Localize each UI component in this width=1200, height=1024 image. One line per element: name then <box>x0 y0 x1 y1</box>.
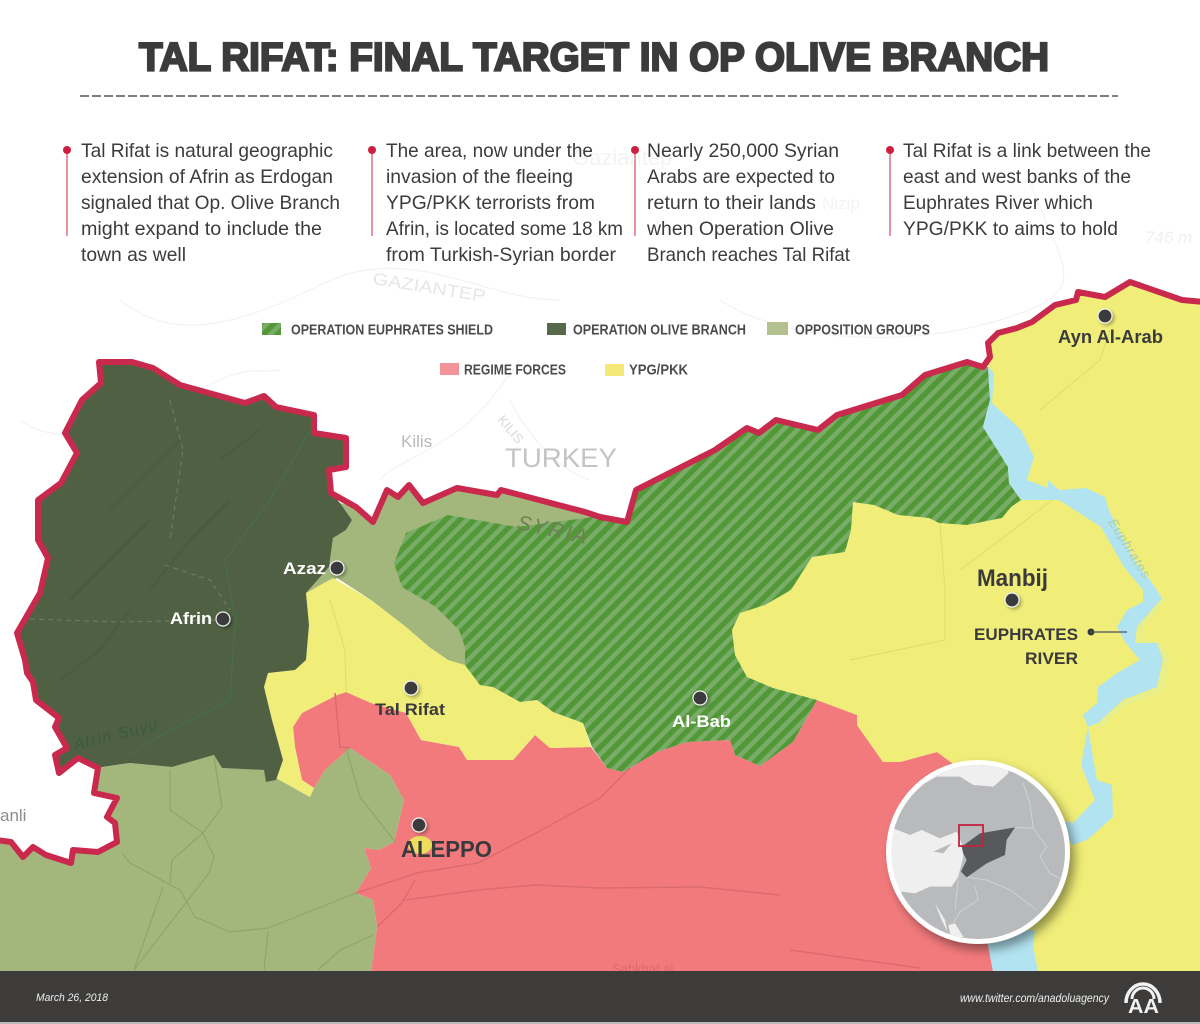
basemap: faint terrain lines and place names: 746 m <box>1145 228 1192 247</box>
city: Manbij <box>977 565 1048 607</box>
legend item: Regime Forces: REGIME FORCES <box>464 362 566 378</box>
map label: Euphrates on river: Euphrates <box>1105 516 1154 581</box>
region: regime forces <box>293 692 1000 972</box>
inset: Syria highlighted <box>961 827 1015 877</box>
text block: Euphrates link <box>886 140 1151 240</box>
text block: Euphrates link: Tal Rifat is a link between the <box>903 140 1151 162</box>
basemap: faint terrain lines and place names: TURKEY <box>505 443 617 473</box>
text block: geographic extension: town as well <box>81 244 186 266</box>
river: Euphrates bank highlight <box>1098 598 1167 727</box>
city: Al-Bab <box>672 691 731 731</box>
text block: geographic extension: signaled that Op. Olive Branch <box>81 192 340 214</box>
region: YPG/PKK west <box>264 578 591 797</box>
map label: Sabkhat al: Sabkhat al <box>612 961 674 976</box>
city: Azaz: Azaz <box>283 559 326 578</box>
city: Manbij: Manbij <box>977 565 1048 592</box>
callout: Euphrates River: RIVER <box>1025 649 1078 668</box>
river: Euphrates lower reach <box>985 930 1038 972</box>
text block: geographic extension: Tal Rifat is natural geographic <box>81 140 333 162</box>
text block: distance from border: Afrin, is located some 18 km <box>386 218 623 240</box>
text block: Euphrates link: YPG/PKK to aims to hold <box>903 218 1118 240</box>
city markers and labels <box>170 309 1163 862</box>
text block: Euphrates link: east and west banks of the <box>903 166 1131 188</box>
map label: Syria: SYRIA <box>515 511 591 549</box>
text block: geographic extension: might expand to include the <box>81 218 322 240</box>
basemap: faint terrain lines and place names: GAZIANTEP <box>371 269 487 306</box>
yellow patch in Aleppo <box>408 836 432 854</box>
text block: distance from border: invasion of the fleeing <box>386 166 573 188</box>
region: YPG/PKK east <box>732 282 1200 972</box>
text block: returning Syrian Arabs: return to their lands <box>647 192 816 214</box>
legend item: Opposition Groups: OPPOSITION GROUPS <box>795 322 930 338</box>
city: Tal Rifat: Tal Rifat <box>375 700 445 719</box>
legend item: Operation Euphrates Shield: OPERATION EUPHRATES SHIELD <box>291 322 493 338</box>
city: Azaz <box>283 559 344 578</box>
city: Ayn Al-Arab: Ayn Al-Arab <box>1058 327 1163 347</box>
inset: surrounding land <box>894 765 1065 939</box>
inset: red location box <box>959 825 983 846</box>
text block: geographic extension: extension of Afrin as Erdogan <box>81 166 333 188</box>
icon: Anadolu Agency logo: AA <box>1128 996 1159 1018</box>
city: Tal Rifat <box>375 681 445 719</box>
title: TAL RIFAT: FINAL TARGET IN OP OLIVE BRANCH <box>139 36 1049 80</box>
text block: distance from border <box>368 140 623 266</box>
callout: Euphrates River <box>974 625 1127 668</box>
legend item: Operation Olive Branch: OPERATION OLIVE BRANCH <box>573 322 746 338</box>
city: Aleppo <box>401 818 492 862</box>
road network <box>30 330 1110 970</box>
text block: distance from border: from Turkish-Syrian border <box>386 244 616 266</box>
basemap: faint terrain lines and place names: Nizip <box>822 194 860 213</box>
text block: distance from border: The area, now under the <box>386 140 593 162</box>
basemap: faint terrain lines and place names: Kilis <box>401 432 432 451</box>
region: Operation Euphrates Shield <box>394 362 1021 772</box>
city: Afrin <box>170 609 230 628</box>
basemap: faint terrain lines and place names <box>0 145 1192 825</box>
legend item: YPG/PKK: YPG/PKK <box>629 362 688 378</box>
text block: returning Syrian Arabs: Branch reaches Tal Rifat <box>647 244 851 266</box>
text block: distance from border: YPG/PKK terrorists from <box>386 192 595 214</box>
callout: Euphrates River: EUPHRATES <box>974 625 1078 644</box>
region: opposition groups north <box>304 485 600 695</box>
city: Ayn Al-Arab <box>1058 309 1163 347</box>
basemap: faint terrain lines and place names: KILIS <box>495 412 527 447</box>
city: Al-Bab: Al-Bab <box>672 712 731 731</box>
map label: Afrin Suyu river: Afrin Suyu <box>71 717 160 754</box>
twitter url: www.twitter.com/anadoluagency <box>960 991 1110 1005</box>
footer bar <box>0 971 1200 1024</box>
city: Afrin: Afrin <box>170 609 212 628</box>
region: opposition groups south-west <box>0 748 404 972</box>
text block: returning Syrian Arabs <box>631 140 851 266</box>
basemap: faint terrain lines and place names: Gaziantep <box>572 145 672 170</box>
basemap: faint terrain lines and place names: anli <box>0 806 26 825</box>
text block: Euphrates link: Euphrates River which <box>903 192 1093 214</box>
Turkish-Syrian border <box>0 282 1200 863</box>
legend item: YPG/PKK <box>605 362 688 378</box>
legend <box>262 322 930 378</box>
text block: returning Syrian Arabs: when Operation Olive <box>646 218 834 240</box>
city: Aleppo: ALEPPO <box>401 836 492 862</box>
region: Operation Olive Branch <box>17 362 352 782</box>
text block: returning Syrian Arabs: Arabs are expected to <box>647 166 835 188</box>
locator inset map <box>880 753 1080 955</box>
date: March 26, 2018 <box>36 992 109 1004</box>
legend item: Regime Forces <box>440 362 566 378</box>
text block: geographic extension <box>63 140 340 266</box>
text block: returning Syrian Arabs: Nearly 250,000 Syrian <box>647 140 839 162</box>
territory map <box>0 282 1200 976</box>
icon: Anadolu Agency logo <box>1126 984 1160 1018</box>
terrain streaks on Afrin <box>60 430 260 680</box>
river: Euphrates <box>983 367 1163 845</box>
